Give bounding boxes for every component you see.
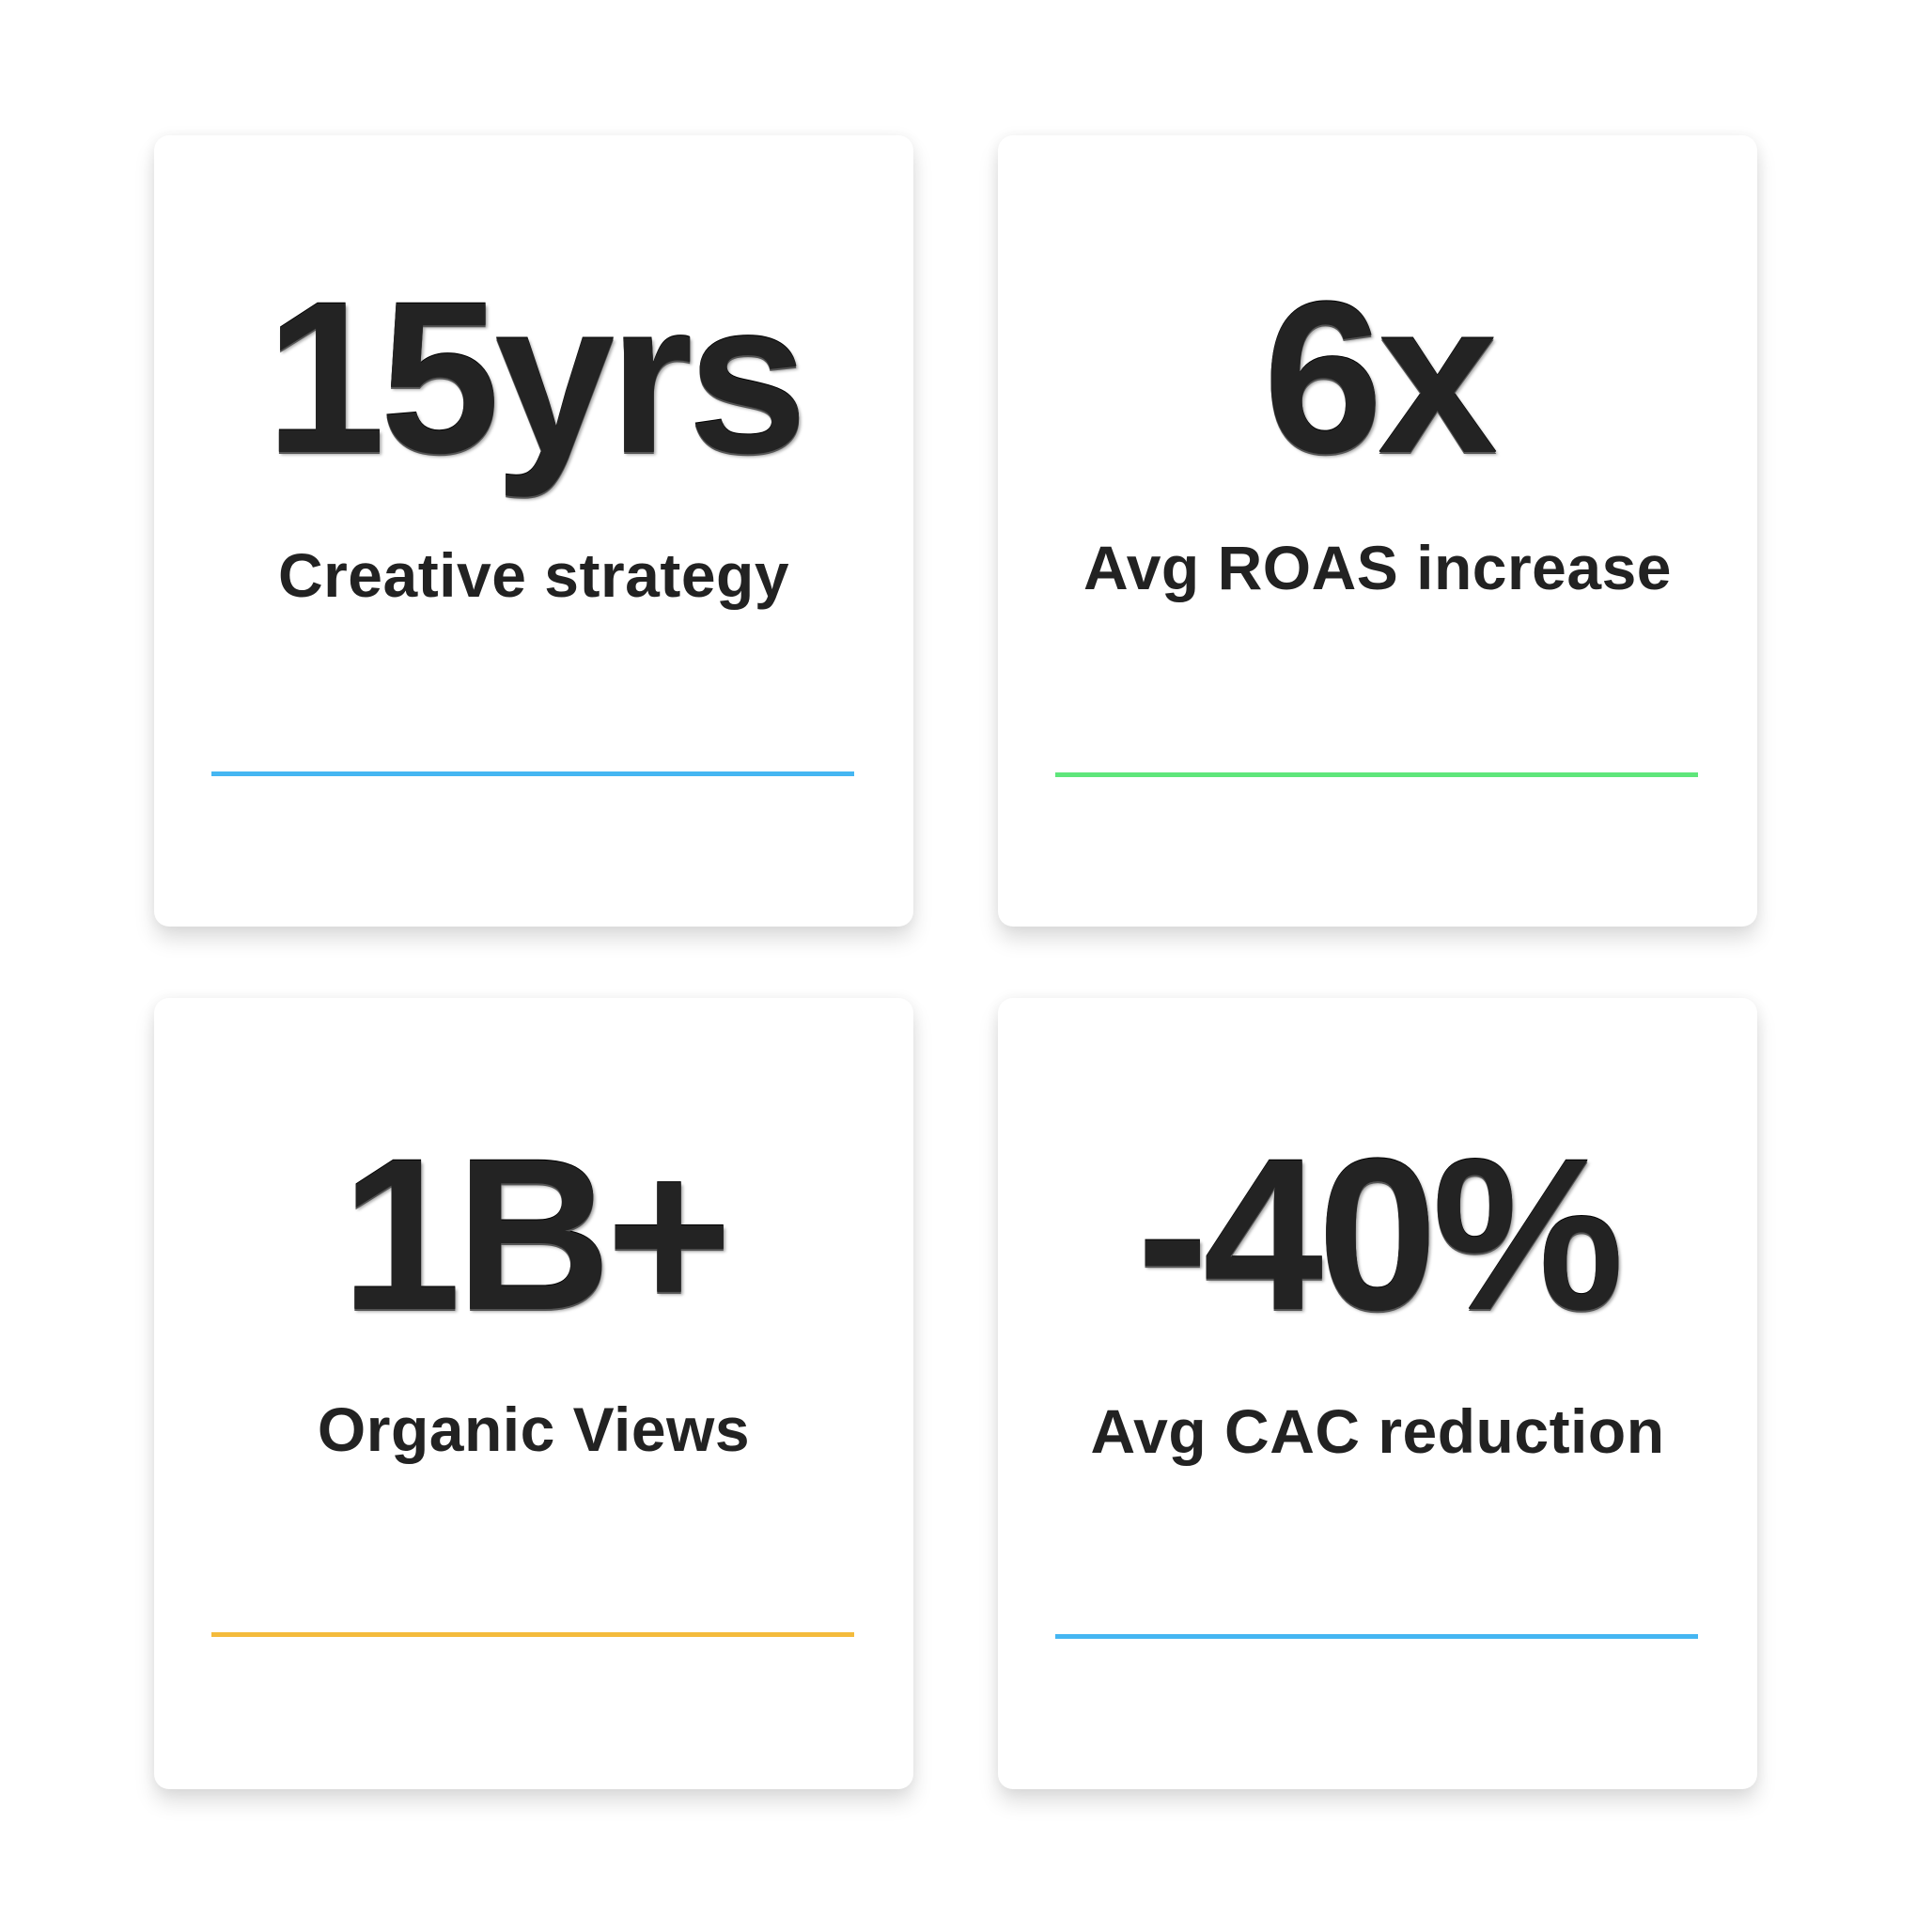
card: 1B+ (154, 998, 913, 1789)
accent line: blue (1055, 1634, 1698, 1639)
big number: 6x: 6x (1263, 257, 1492, 498)
card: 15yrs (154, 135, 913, 927)
card: -40% (998, 998, 1757, 1789)
label: Organic Views: Organic Views (318, 1394, 750, 1464)
accent line: green (1055, 772, 1698, 777)
label: Avg ROAS increase: Avg ROAS increase (1083, 533, 1672, 602)
card: 6x (998, 135, 1757, 927)
accent line: blue (211, 771, 854, 776)
label: Creative strategy: Creative strategy (278, 540, 789, 610)
big number: 15yrs: 15yrs (265, 257, 802, 498)
big number: -40%: -40% (1137, 1114, 1618, 1355)
label: Avg CAC reduction: Avg CAC reduction (1090, 1396, 1665, 1466)
accent line: yellow (211, 1632, 854, 1637)
big number: 1B+: 1B+ (341, 1114, 726, 1355)
